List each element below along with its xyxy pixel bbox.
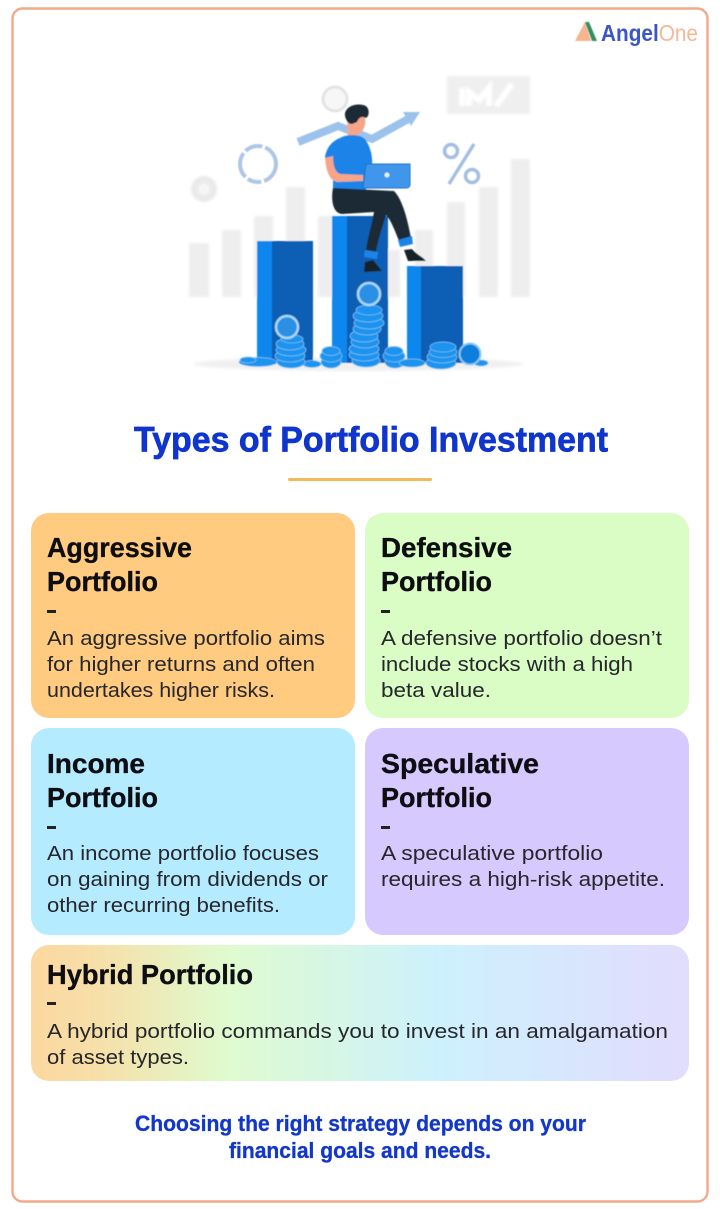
dash	[381, 826, 390, 829]
description: of asset types.	[47, 1046, 189, 1069]
description: An aggressive portfolio aims	[47, 627, 325, 650]
bar right	[407, 266, 463, 363]
heading: Speculative	[381, 748, 539, 779]
laptop logo	[384, 172, 390, 178]
heading: Portfolio	[47, 566, 158, 597]
shoes	[364, 249, 426, 272]
dash	[381, 610, 390, 613]
heading: Hybrid Portfolio	[47, 959, 253, 990]
logo wordmark: AngelOne	[601, 20, 698, 46]
icon: coin grey left	[191, 176, 217, 202]
torso	[325, 135, 372, 190]
bar middle	[332, 216, 388, 363]
neck and head	[347, 113, 365, 140]
cuffs	[364, 236, 413, 259]
description: A defensive portfolio doesn’t	[381, 627, 662, 650]
hair	[345, 104, 369, 124]
description: beta value.	[381, 679, 491, 702]
ground shadow	[193, 357, 523, 371]
heading: Portfolio	[47, 782, 158, 813]
bar left	[257, 241, 313, 363]
panel: income portfolio	[31, 728, 355, 935]
background chart card	[447, 76, 530, 114]
closing note: financial goals and needs.	[229, 1138, 491, 1163]
title underline	[288, 478, 432, 481]
coin stacks	[239, 305, 488, 369]
heading: Defensive	[381, 532, 512, 563]
panel: defensive portfolio	[365, 513, 689, 718]
heading: Aggressive	[47, 532, 192, 563]
closing note: Choosing the right strategy depends on your	[135, 1111, 586, 1136]
icon: logo triangle	[575, 22, 597, 41]
logo: Angel One	[575, 20, 698, 46]
description: A speculative portfolio	[381, 842, 603, 865]
arrow head	[403, 112, 420, 126]
description: An income portfolio focuses	[47, 842, 319, 865]
heading: Portfolio	[381, 782, 492, 813]
icon: coin grey top	[323, 87, 347, 111]
description: requires a high-risk appetite.	[381, 868, 665, 891]
description: A hybrid portfolio commands you to invest in an amalgamation	[47, 1020, 668, 1043]
dash	[47, 1002, 56, 1005]
arrow: rising trend	[298, 118, 410, 142]
panel: hybrid portfolio	[31, 945, 689, 1081]
heading: Income	[47, 748, 145, 779]
description: for higher returns and often	[47, 653, 315, 676]
dash	[47, 826, 56, 829]
title: Types of Portfolio Investment	[134, 420, 608, 460]
panel: speculative portfolio	[365, 728, 689, 935]
illustration: investor sitting on bar chart	[189, 76, 530, 371]
heading: Portfolio	[381, 566, 492, 597]
icon: percent	[444, 144, 478, 184]
icon: ring chart	[240, 146, 276, 182]
description: other recurring benefits.	[47, 894, 280, 917]
person	[325, 104, 426, 272]
legs	[332, 188, 411, 252]
dash	[47, 610, 56, 613]
description: undertakes higher risks.	[47, 679, 275, 702]
panel: aggressive portfolio	[31, 513, 355, 718]
background grey bars	[189, 159, 530, 297]
arm	[325, 156, 363, 182]
description: on gaining from dividends or	[47, 868, 328, 891]
description: include stocks with a high	[381, 653, 633, 676]
laptop	[363, 164, 410, 188]
coins upright	[276, 283, 480, 364]
